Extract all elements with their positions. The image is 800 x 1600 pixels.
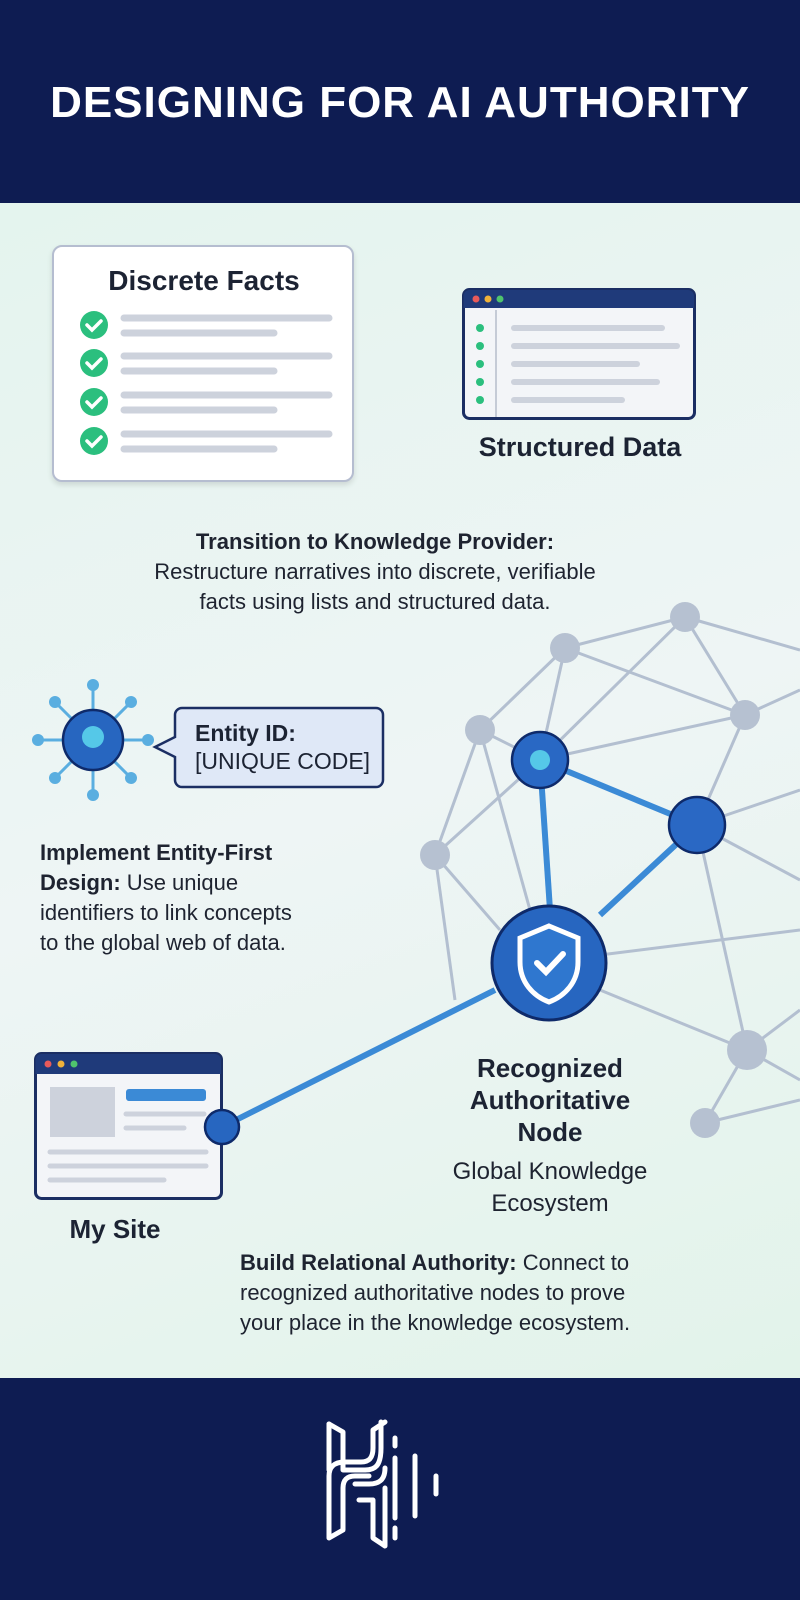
- callout: entity ID: [152, 706, 384, 788]
- icon: structured data window: [462, 288, 696, 420]
- label: My Site: My Site: [69, 1214, 161, 1244]
- site connector node: [204, 1108, 240, 1146]
- footer band: [0, 1378, 800, 1600]
- text: relational authority: Build Relational Authority: Connect to: [240, 1250, 629, 1275]
- main background: [0, 203, 800, 1378]
- text: entity-first design: [40, 840, 292, 955]
- text: relational authority: your place in the knowledge ecosystem.: [240, 1310, 630, 1335]
- text: transition to knowledge provider: Restructure narratives into discrete, verifiable: [154, 559, 596, 584]
- label: Structured Data: Structured Data: [479, 432, 681, 462]
- blue node 2: [668, 796, 726, 854]
- checklist: [80, 311, 332, 455]
- text: entity-first design: Implement Entity-First: [40, 840, 272, 865]
- text: relational authority: [240, 1250, 630, 1335]
- text: relational authority: recognized authoritative nodes to prove: [240, 1280, 625, 1305]
- label: recognized authoritative node: [470, 1053, 630, 1147]
- text: transition to knowledge provider: facts using lists and structured data.: [200, 589, 550, 614]
- label: global knowledge ecosystem: Ecosystem: [491, 1190, 609, 1217]
- text: transition to knowledge provider: Transition to Knowledge Provider:: [196, 529, 554, 554]
- label: recognized authoritative node: Recognized: [477, 1053, 623, 1083]
- header band: [0, 0, 800, 203]
- icon: shield authoritative node: [490, 904, 608, 1022]
- callout: entity ID: [UNIQUE CODE]: [195, 748, 370, 774]
- label: recognized authoritative node: Node: [518, 1117, 582, 1147]
- label: global knowledge ecosystem: Global Knowledge: [453, 1158, 647, 1185]
- icon: logo: [326, 1420, 438, 1548]
- title: DESIGNING FOR AI AUTHORITY: [50, 78, 750, 127]
- label: recognized authoritative node: Authoritative: [470, 1085, 630, 1115]
- text: entity-first design: Design: Use unique: [40, 870, 238, 895]
- panel: discrete facts: [52, 245, 354, 482]
- blue node 1: [510, 730, 570, 790]
- heading: Discrete Facts: Discrete Facts: [108, 265, 300, 296]
- text: transition to knowledge provider: [154, 529, 596, 614]
- text: entity-first design: identifiers to link concepts: [40, 900, 292, 925]
- label: global knowledge ecosystem: [453, 1158, 647, 1217]
- text: entity-first design: to the global web of data.: [40, 930, 286, 955]
- icon: entity node: [32, 679, 154, 801]
- icon: my site window: [34, 1052, 223, 1200]
- callout: entity ID: Entity ID:: [195, 720, 296, 746]
